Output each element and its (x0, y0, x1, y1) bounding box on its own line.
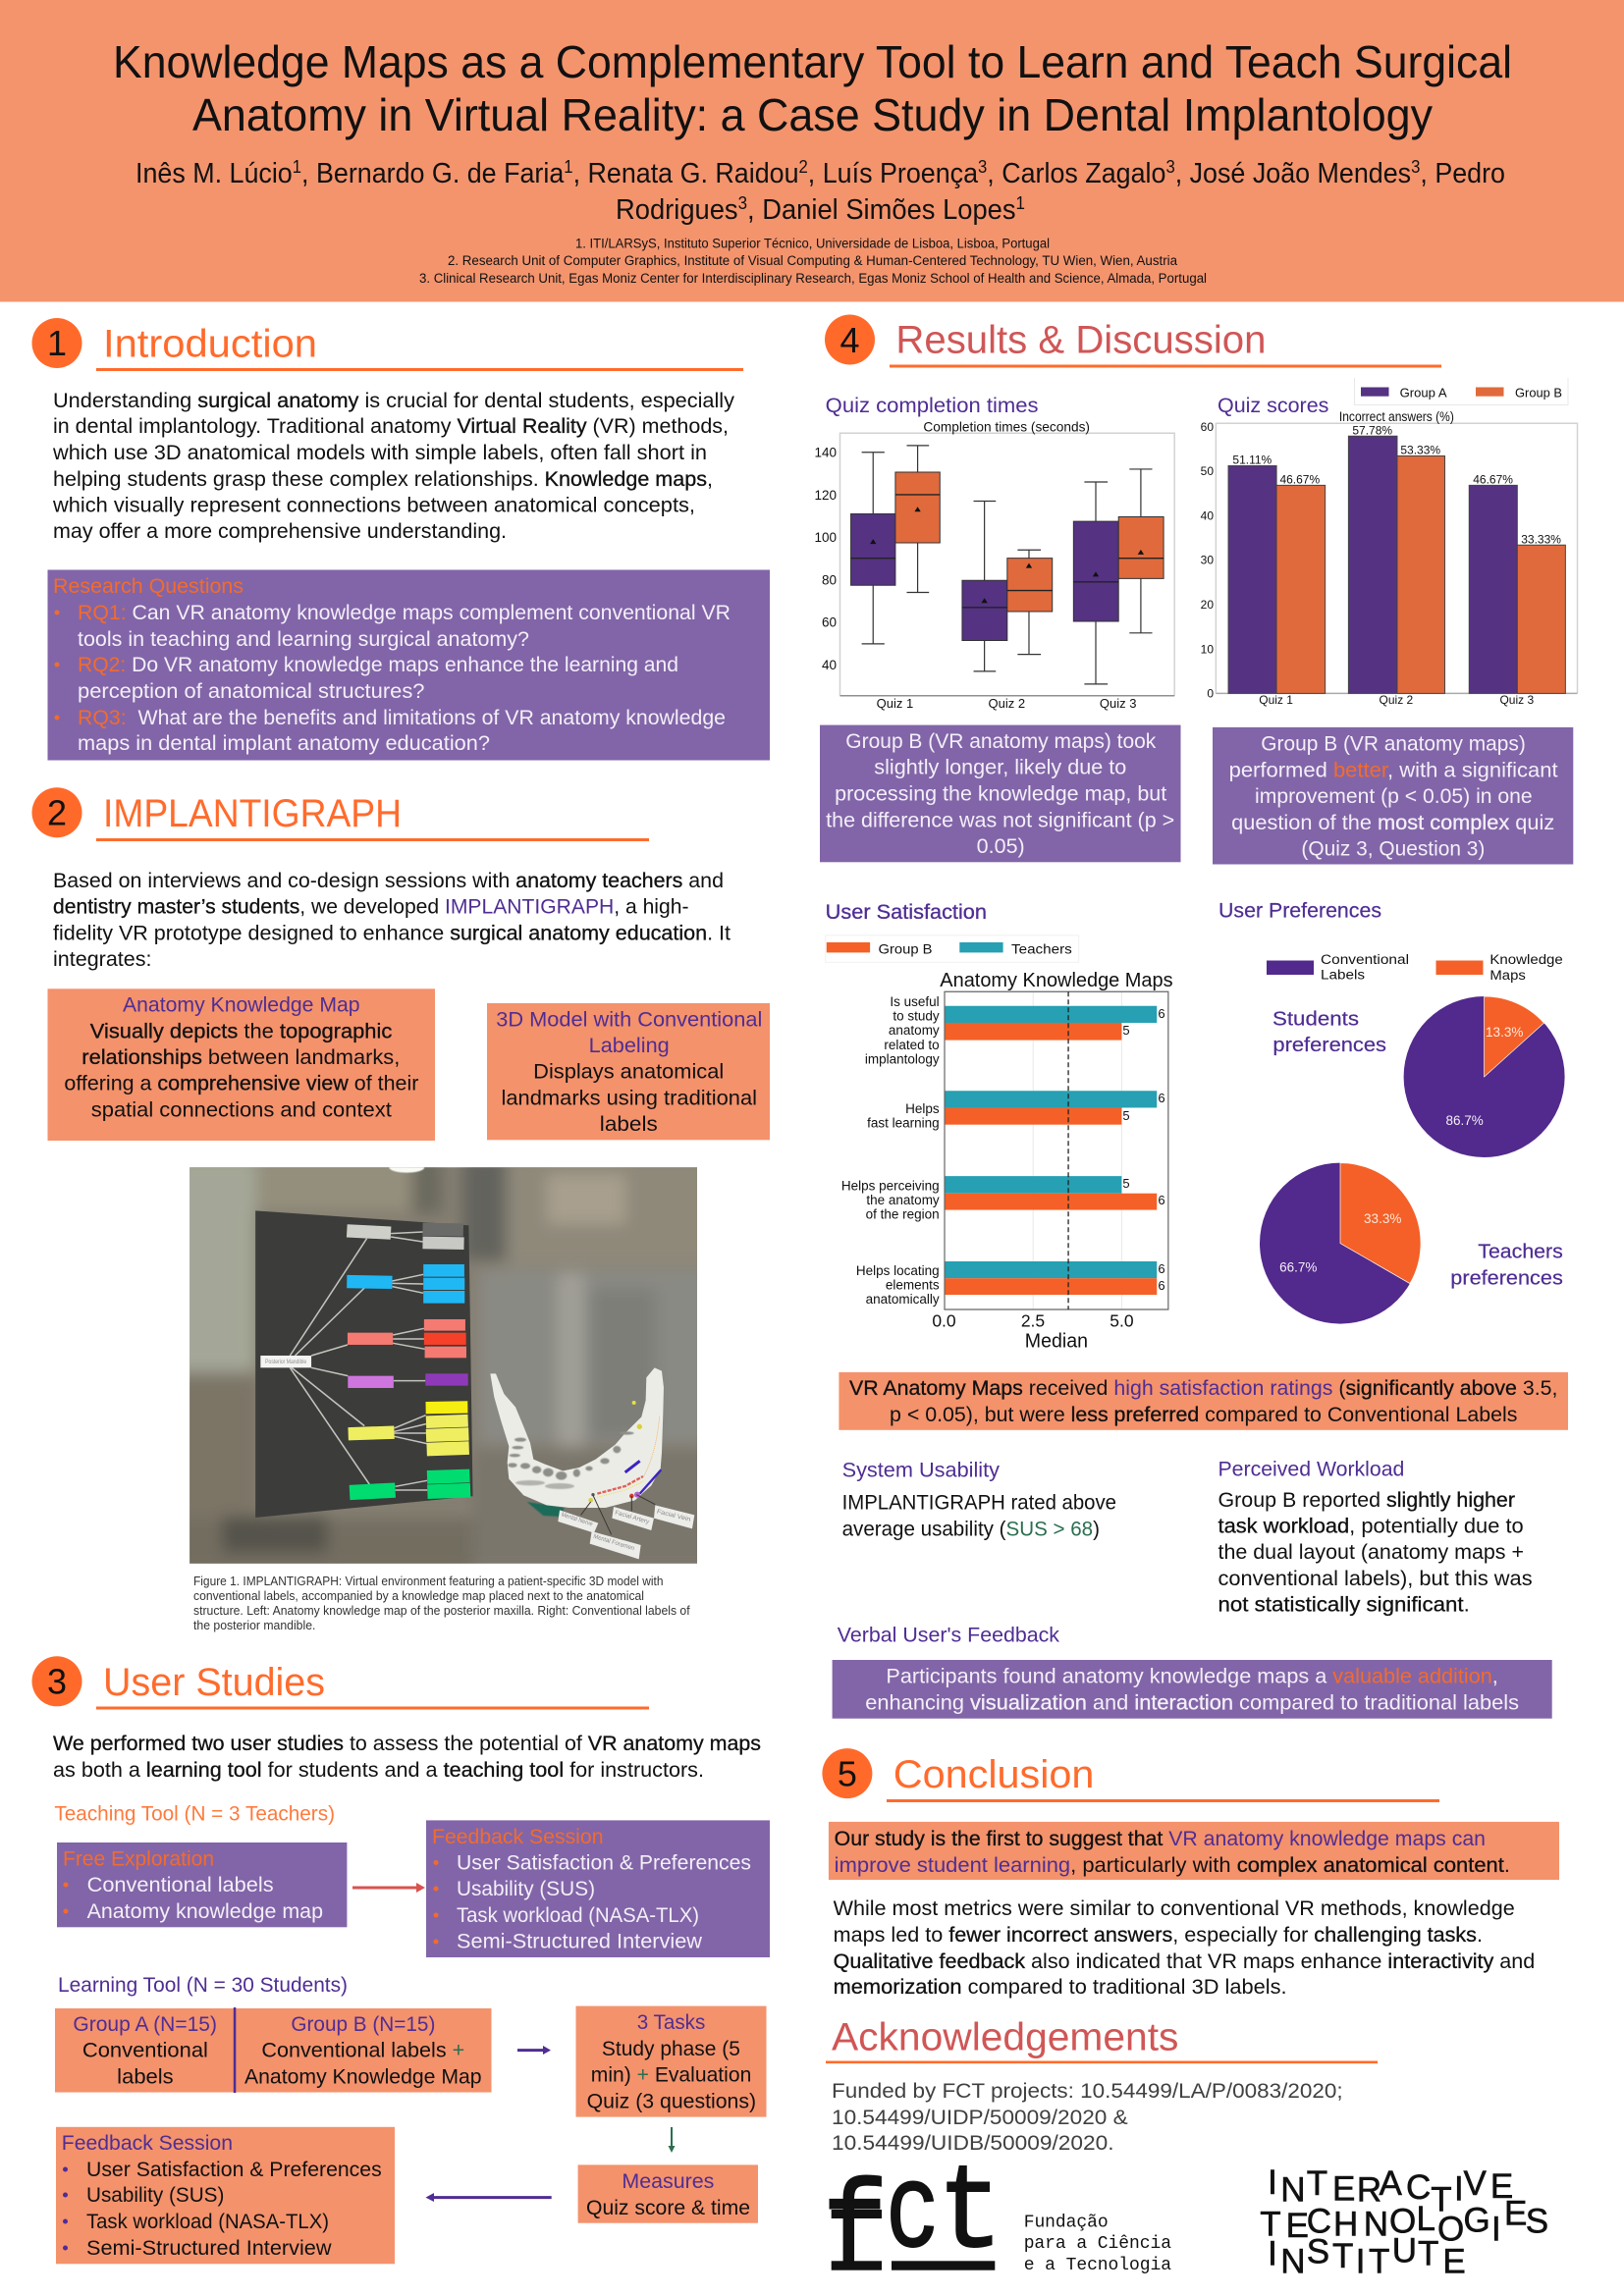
block: system usability: average usability (SUS > 68) (842, 1518, 1100, 1540)
bar chart: anatomy knowledge maps satisfaction: 6 (1158, 1278, 1165, 1293)
panel: students feedback session: Semi-Structured Interview (86, 2237, 332, 2260)
pie chart: teachers preferences: preferences (1450, 1267, 1563, 1289)
logo: Interactive Technologies Institute: INSTITUTE (1268, 2232, 1466, 2281)
callout: completion time finding: processing the knowledge map, but (835, 783, 1166, 805)
implantigraph text (53, 870, 731, 971)
section 2 heading: IMPLANTIGRAPH: IMPLANTIGRAPH (103, 792, 402, 835)
legend: preferences: Knowledge (1489, 952, 1563, 967)
pie chart: students preferences: preferences (1272, 1035, 1386, 1056)
panel: groups A and B: labels (117, 2066, 174, 2089)
bar chart: incorrect answers: Quiz 1 (1259, 693, 1293, 707)
authors: 3 (1165, 157, 1175, 177)
arrow: groups to tasks (517, 2046, 551, 2055)
pie chart: teachers preferences (1260, 1163, 1563, 1324)
callout: verbal feedback (833, 1660, 1552, 1719)
mandible model: Mental Nerve (561, 1512, 594, 1528)
block: perceived workload: Group B reported slightly higher (1218, 1489, 1515, 1512)
box plot: completion times: Quiz 3 (1100, 696, 1136, 711)
panel: 3D model with conventional labeling: 3D Model with Conventional (496, 1008, 762, 1031)
panel: 3 tasks: Quiz (3 questions) (587, 2090, 756, 2112)
heading: user preferences: User Preferences (1218, 899, 1381, 922)
panel: anatomy knowledge map: Anatomy Knowledge Map (123, 994, 360, 1017)
introduction text: helping students grasp these complex relationships. Knowledge maps, (53, 468, 713, 491)
panel: measures: Measures (622, 2170, 714, 2193)
knowledge map panel (255, 1210, 473, 1518)
affiliations: 1. ITI/LARSyS, Instituto Superior Técnico, Universidade de Lisboa, Lisboa, Portugal (575, 236, 1050, 251)
callout: completion time finding: 0.05) (977, 835, 1025, 858)
panel: groups A and B: Group B (N=15) (291, 2013, 435, 2036)
bar chart: anatomy knowledge maps satisfaction: Helps (905, 1101, 940, 1116)
panel: 3 tasks: min) + Evaluation (591, 2063, 751, 2087)
bar chart: incorrect answers: Quiz 3 (1499, 693, 1534, 707)
authors: 3 (1411, 157, 1420, 177)
arrow: measures to feedback (426, 2193, 552, 2202)
box plot: completion times: 40 (822, 658, 837, 672)
pie chart: teachers preferences: Teachers (1478, 1241, 1563, 1262)
acknowledgements text: 10.54499/UIDP/50009/2020 & (832, 2107, 1128, 2129)
mandible model: Facial Vein (656, 1508, 692, 1523)
panel: research questions: perception of anatomical structures? (78, 680, 424, 703)
acknowledgements text: Funded by FCT projects: 10.54499/LA/P/0083/2020; (832, 2080, 1343, 2103)
logo: FCT: f (823, 2163, 888, 2296)
implantigraph text: fidelity VR prototype designed to enhance surgical anatomy education . It (53, 922, 731, 944)
arrow: exploration to feedback (352, 1883, 425, 1893)
introduction text: which use 3D anatomical models with simple labels, often fall short in (52, 442, 707, 464)
bar chart: incorrect answers: Quiz 2 (1380, 693, 1414, 707)
panel: students feedback session: User Satisfaction & Preferences (86, 2159, 382, 2181)
logo: FCT: c (886, 2146, 940, 2282)
conclusion text: maps led to fewer incorrect answers , especially for challenging tasks. (834, 1924, 1483, 1947)
logo: FCT: e a Tecnologia (1024, 2256, 1171, 2275)
bar chart: anatomy knowledge maps satisfaction: Helps locating (856, 1263, 940, 1278)
bar chart: anatomy knowledge maps satisfaction: 5 (1122, 1108, 1130, 1123)
acknowledgements text: 10.54499/UIDB/50009/2020. (832, 2132, 1113, 2155)
box plot: completion times: 100 (814, 530, 837, 545)
callout: main conclusion: improve student learning , particularly with complex anatomical content . (835, 1854, 1510, 1877)
bar chart: incorrect answers: 30 (1201, 554, 1214, 567)
panel: anatomy knowledge map (47, 988, 435, 1141)
panel: teachers feedback session: Feedback Session (432, 1826, 603, 1848)
panel: anatomy knowledge map: Visually depicts the topographic (90, 1020, 392, 1042)
panel: research questions: Research Questions (53, 575, 244, 598)
section 3 heading: User Studies: 3 (47, 1662, 67, 1702)
panel: students feedback session: Task workload (NASA-TLX) (86, 2211, 329, 2233)
block: perceived workload (1218, 1459, 1533, 1617)
bar chart: anatomy knowledge maps satisfaction: 5 (1122, 1023, 1130, 1038)
authors: 3 (738, 193, 747, 213)
pie chart: students preferences: 86.7% (1445, 1113, 1484, 1128)
affiliations (419, 236, 1207, 286)
introduction text (52, 390, 735, 543)
callout: completion time finding: Group B (VR anatomy maps) took (845, 730, 1157, 753)
bar chart: anatomy knowledge maps satisfaction: 5.0 (1110, 1311, 1134, 1331)
block: perceived workload: Perceived Workload (1218, 1459, 1404, 1481)
panel: 3 tasks (575, 2006, 766, 2117)
title: Anatomy in Virtual Reality: a Case Study in Dental Implantology (192, 89, 1433, 140)
bar chart: anatomy knowledge maps satisfaction: 6 (1158, 1091, 1165, 1105)
callout: quiz score finding (1213, 727, 1573, 864)
implantigraph text: Based on interviews and co-design sessions with anatomy teachers and (53, 870, 724, 892)
panel: students feedback session (56, 2127, 395, 2264)
panel: teachers feedback session: Task workload (NASA-TLX) (457, 1904, 699, 1927)
callout: quiz score finding: improvement (p < 0.05) in one (1255, 785, 1533, 808)
title (113, 36, 1512, 140)
authors: 1 (293, 157, 301, 177)
panel: groups A and B: Anatomy Knowledge Map (244, 2066, 482, 2089)
figure caption: structure. Left: Anatomy knowledge map of the posterior maxilla. Right: Conventional labels of (193, 1603, 690, 1618)
logo: Interactive Technologies Institute (1260, 2163, 1548, 2281)
figure caption (193, 1574, 690, 1632)
heading: quiz completion times: Quiz completion times (826, 395, 1039, 417)
panel: 3D model with conventional labeling: Displays anatomical (533, 1061, 724, 1084)
panel: teachers feedback session: User Satisfaction & Preferences (457, 1851, 751, 1875)
authors (135, 157, 1505, 226)
affiliations: 3. Clinical Research Unit, Egas Moniz Center for Interdisciplinary Research, Egas Moniz School of Health and Science, Almada, Portugal (419, 271, 1207, 286)
introduction text: Understanding surgical anatomy is crucial for dental students, especially (53, 390, 735, 412)
bar chart: anatomy knowledge maps satisfaction: anatomy (889, 1023, 940, 1038)
logo: FCT: t (938, 2146, 1002, 2282)
bar chart: incorrect answers: 46.67% (1279, 473, 1320, 487)
panel: students feedback session: Usability (SUS) (86, 2184, 224, 2207)
panel: students feedback session: Feedback Session (62, 2132, 233, 2155)
panel: free exploration: Conventional labels (87, 1874, 274, 1896)
authors: , Carlos Zagalo (987, 158, 1165, 189)
panel: 3 tasks: Study phase (5 (602, 2038, 740, 2060)
pie chart: students preferences (1272, 996, 1565, 1157)
logo: FCT: para a Ciência (1024, 2234, 1171, 2254)
panel: research questions: RQ3: What are the benefits and limitations of VR anatomy knowledge (78, 707, 726, 729)
block: system usability: IMPLANTIGRAPH rated above (842, 1492, 1116, 1514)
box plot: completion times: 140 (814, 446, 837, 460)
bar chart: incorrect answers: 40 (1201, 508, 1214, 522)
panel: groups A and B: Group A (N=15) (73, 2013, 217, 2036)
learning tool heading: Learning Tool (N = 30 Students) (58, 1974, 348, 1997)
box plot: completion times: 120 (814, 488, 837, 503)
callout: main conclusion: Our study is the first to suggest that VR anatomy knowledge maps can (835, 1828, 1486, 1850)
bar chart: anatomy knowledge maps satisfaction: the anatomy (866, 1193, 940, 1207)
figure caption: conventional labels, accompanied by a knowledge map placed next to the anatomical (193, 1588, 644, 1603)
panel: 3D model with conventional labeling: landmarks using traditional (501, 1087, 757, 1109)
authors: , Luís Proença (808, 158, 979, 189)
block: perceived workload: task workload , potentially due to (1218, 1516, 1524, 1538)
callout: satisfaction finding: VR Anatomy Maps received high satisfaction ratings (significantly above 3.5, (849, 1377, 1557, 1400)
panel: research questions (47, 569, 770, 760)
bar chart: anatomy knowledge maps satisfaction: implantology (865, 1051, 940, 1066)
section 1 heading: Introduction: 1 (47, 323, 67, 363)
section 4 heading: Results & Discussion: 4 (839, 320, 860, 360)
callout: quiz score finding: question of the most complex quiz (1231, 812, 1554, 834)
block: perceived workload: the dual layout (anatomy maps + (1218, 1541, 1524, 1564)
panel: teachers feedback session: Semi-Structured Interview (457, 1931, 703, 1953)
authors: 1 (564, 157, 573, 177)
callout: completion time finding (820, 725, 1180, 862)
section 2 heading: IMPLANTIGRAPH: 2 (47, 793, 67, 833)
knowledge map panel: Posterior Mandible (265, 1359, 307, 1365)
authors: , Daniel Simões Lopes (747, 194, 1016, 226)
figure: VR environment with knowledge map and mandible (189, 1167, 697, 1564)
bar chart: anatomy knowledge maps satisfaction: fast learning (867, 1115, 940, 1130)
bar chart: incorrect answers: 50 (1201, 464, 1214, 478)
conclusion text (834, 1897, 1535, 1999)
callout: verbal feedback: Participants found anatomy knowledge maps a valuable addition, (886, 1665, 1498, 1688)
bar chart: incorrect answers: 0 (1207, 687, 1214, 701)
introduction text: may offer a more comprehensive understanding. (53, 520, 507, 543)
legend: preferences: Maps (1489, 968, 1526, 983)
bar chart: anatomy knowledge maps satisfaction: elements (886, 1278, 940, 1293)
box plot: completion times: Completion times (seconds) (923, 418, 1090, 434)
figure caption: Figure 1. IMPLANTIGRAPH: Virtual environment featuring a patient-specific 3D model with (193, 1574, 664, 1588)
panel: research questions: RQ2: Do VR anatomy knowledge maps enhance the learning and (78, 654, 678, 676)
panel: anatomy knowledge map: spatial connections and context (91, 1098, 392, 1121)
authors: 2 (799, 157, 808, 177)
legend: preferences: Labels (1321, 968, 1365, 983)
bar chart: anatomy knowledge maps satisfaction: Is useful (890, 994, 940, 1009)
authors: Rodrigues (616, 194, 745, 226)
panel: 3D model with conventional labeling: Labeling (589, 1035, 670, 1057)
box plot: completion times: 60 (822, 615, 837, 630)
heading: user satisfaction: User Satisfaction (826, 901, 987, 924)
bar chart: anatomy knowledge maps satisfaction: 6 (1158, 1193, 1165, 1207)
mandible model (490, 1367, 694, 1559)
bar chart: incorrect answers: 53.33% (1400, 444, 1440, 457)
bar chart: anatomy knowledge maps satisfaction: 6 (1158, 1261, 1165, 1276)
conclusion text: memorization compared to traditional 3D labels. (834, 1976, 1287, 1999)
legend: satisfaction groups: Teachers (1011, 941, 1072, 957)
section 3 heading: User Studies: User Studies (103, 1661, 325, 1704)
bar chart: incorrect answers: 20 (1201, 598, 1214, 612)
panel: groups A and B: Conventional (82, 2040, 208, 2062)
callout: satisfaction finding (839, 1372, 1568, 1430)
section 4 heading: Results & Discussion: Results & Discussion (895, 318, 1266, 361)
logo: FCT: Fundação (1024, 2213, 1109, 2232)
legend: quiz scores groups: Group A (1400, 385, 1447, 400)
callout: completion time finding: the difference was not significant (p > (826, 809, 1174, 831)
legend: satisfaction groups (826, 935, 1079, 962)
panel: research questions: RQ1: Can VR anatomy knowledge maps complement conventional VR (78, 602, 731, 624)
block: perceived workload: not statistically significant . (1218, 1594, 1470, 1617)
panel: groups A and B: Conventional labels + (261, 2040, 464, 2062)
teaching tool heading: Teaching Tool (N = 3 Teachers) (54, 1802, 335, 1825)
panel: free exploration (57, 1842, 347, 1927)
callout: completion time finding: slightly longer, likely due to (874, 757, 1126, 779)
panel: free exploration: Anatomy knowledge map (87, 1900, 323, 1923)
panel: teachers feedback session (426, 1820, 770, 1957)
title: Knowledge Maps as a Complementary Tool to Learn and Teach Surgical (113, 36, 1512, 87)
user studies text (53, 1733, 761, 1782)
panel: measures (578, 2164, 758, 2223)
bar chart: anatomy knowledge maps satisfaction: to study (893, 1009, 940, 1024)
logo: FCT (823, 2146, 1171, 2296)
bar chart: anatomy knowledge maps satisfaction: Anatomy Knowledge Maps (940, 970, 1173, 991)
section 5 heading: Conclusion: Conclusion (893, 1753, 1094, 1796)
bar chart: incorrect answers: Incorrect answers (%) (1339, 409, 1454, 424)
callout: satisfaction finding: p < 0.05), but were less preferred compared to Conventional Labels (890, 1404, 1517, 1426)
panel: 3D model with conventional labeling (487, 1003, 770, 1140)
section 3 heading: User Studies (31, 1656, 649, 1710)
introduction text: in dental implantology. Traditional anatomy Virtual Reality (VR) methods, (53, 415, 729, 438)
bar chart: anatomy knowledge maps satisfaction: anatomically (866, 1292, 940, 1307)
box plot: completion times (814, 418, 1174, 711)
authors: , Pedro (1420, 158, 1505, 189)
bar chart: incorrect answers: 10 (1201, 642, 1214, 656)
panel: teachers feedback session: Usability (SUS) (457, 1878, 595, 1900)
authors: , Bernardo G. de Faria (301, 158, 565, 189)
pie chart: teachers preferences: 66.7% (1279, 1260, 1317, 1275)
bar chart: incorrect answers: 46.67% (1473, 473, 1513, 487)
section 1 heading: Introduction: Introduction (103, 322, 317, 365)
panel: anatomy knowledge map: relationships between landmarks, (81, 1046, 400, 1069)
block: perceived workload: conventional labels), but this was (1218, 1568, 1533, 1590)
acknowledgements text (832, 2080, 1343, 2155)
mandible model: Mental Foramen (592, 1533, 635, 1552)
bar chart: anatomy knowledge maps satisfaction: 6 (1158, 1006, 1165, 1021)
legend: quiz scores groups (1355, 378, 1568, 404)
pie chart: students preferences: Students (1272, 1008, 1359, 1030)
callout: quiz score finding: performed better, with a significant (1229, 759, 1558, 781)
panel: groups A and B (55, 2007, 491, 2093)
conclusion text: Qualitative feedback also indicated that VR maps enhance interactivity and (834, 1950, 1535, 1973)
panel: anatomy knowledge map: offering a comprehensive view of their (64, 1073, 418, 1095)
legend: preferences: Conventional (1321, 952, 1409, 967)
box plot: completion times: Quiz 2 (989, 696, 1025, 711)
callout: verbal feedback: enhancing visualization and interaction compared to traditional labels (865, 1691, 1519, 1714)
section 4 heading: Results & Discussion (825, 314, 1441, 367)
authors: Inês M. Lúcio (135, 158, 304, 189)
bar chart: incorrect answers (1201, 409, 1577, 707)
heading: quiz scores: Quiz scores (1218, 395, 1328, 417)
figure caption: the posterior mandible. (193, 1618, 315, 1632)
bar chart: anatomy knowledge maps satisfaction: 5 (1122, 1176, 1130, 1191)
bar chart: incorrect answers: 60 (1201, 420, 1214, 434)
logo: Interactive Technologies Institute: TECHNOLOGIES (1260, 2194, 1548, 2249)
bar chart: anatomy knowledge maps satisfaction: of the region (866, 1207, 940, 1222)
panel: measures: Quiz score & time (586, 2197, 750, 2219)
panel: free exploration: Free Exploration (63, 1848, 214, 1871)
panel: 3D model with conventional labeling: labels (600, 1113, 658, 1136)
authors: , José João Mendes (1175, 158, 1411, 189)
introduction text: which visually represent connections between anatomical concepts, (52, 495, 695, 516)
authors: 1 (1016, 193, 1025, 213)
panel: 3 tasks: 3 Tasks (637, 2011, 705, 2034)
user studies text: We performed two user studies to assess the potential of VR anatomy maps (53, 1733, 761, 1755)
panel: research questions: tools in teaching and learning surgical anatomy? (78, 628, 529, 651)
bar chart: anatomy knowledge maps satisfaction: 2.5 (1021, 1311, 1045, 1331)
section 5 heading: Conclusion (822, 1748, 1439, 1802)
authors: 3 (978, 157, 987, 177)
section 5 heading: Conclusion: 5 (838, 1754, 857, 1794)
pie chart: teachers preferences: 33.3% (1364, 1211, 1401, 1226)
heading: verbal user's feedback: Verbal User's Feedback (838, 1624, 1059, 1646)
conclusion text: While most metrics were similar to conventional VR methods, knowledge (834, 1897, 1515, 1920)
legend: preferences (1267, 952, 1563, 983)
mandible model: Facial Artery (614, 1510, 651, 1525)
box plot: completion times: Quiz 1 (877, 696, 913, 711)
affiliations: 2. Research Unit of Computer Graphics, Institute of Visual Computing & Human-Centered Technology, TU Wien, Wien, Austria (448, 253, 1177, 268)
block: system usability: System Usability (842, 1460, 1001, 1482)
box plot: completion times: 80 (822, 573, 837, 587)
authors: , Renata G. Raidou (573, 158, 799, 189)
heading: acknowledgements: Acknowledgements (832, 2016, 1178, 2059)
callout: main conclusion (829, 1822, 1559, 1880)
legend: quiz scores groups: Group B (1515, 385, 1562, 400)
section 1 heading: Introduction (31, 318, 743, 371)
bar chart: incorrect answers: 33.33% (1521, 532, 1561, 546)
pie chart: students preferences: 13.3% (1486, 1025, 1523, 1040)
callout: quiz score finding: (Quiz 3, Question 3) (1301, 838, 1485, 861)
section 2 heading: IMPLANTIGRAPH (31, 787, 649, 841)
implantigraph text: dentistry master’s students, we developed IMPLANTIGRAPH, a high- (53, 896, 689, 919)
implantigraph text: integrates: (53, 948, 151, 971)
callout: quiz score finding: Group B (VR anatomy maps) (1261, 733, 1526, 756)
bar chart: anatomy knowledge maps satisfaction: related to (884, 1038, 940, 1052)
bar chart: anatomy knowledge maps satisfaction (841, 970, 1173, 1353)
legend: satisfaction groups: Group B (878, 941, 933, 957)
logo: Interactive Technologies Institute: INTERACTIVE (1268, 2163, 1513, 2219)
bar chart: incorrect answers: 51.11% (1232, 454, 1272, 467)
bar chart: anatomy knowledge maps satisfaction: Median (1025, 1331, 1088, 1353)
arrow: tasks to measures (668, 2127, 676, 2153)
user studies text: as both a learning tool for students and a teaching tool for instructors. (53, 1759, 704, 1782)
panel: research questions: maps in dental implant anatomy education? (78, 732, 490, 755)
block: system usability (842, 1460, 1116, 1540)
bar chart: anatomy knowledge maps satisfaction: Helps perceiving (841, 1179, 940, 1194)
bar chart: incorrect answers: 57.78% (1352, 423, 1392, 437)
bar chart: anatomy knowledge maps satisfaction: 0.0 (932, 1311, 956, 1331)
header banner (0, 0, 1624, 302)
